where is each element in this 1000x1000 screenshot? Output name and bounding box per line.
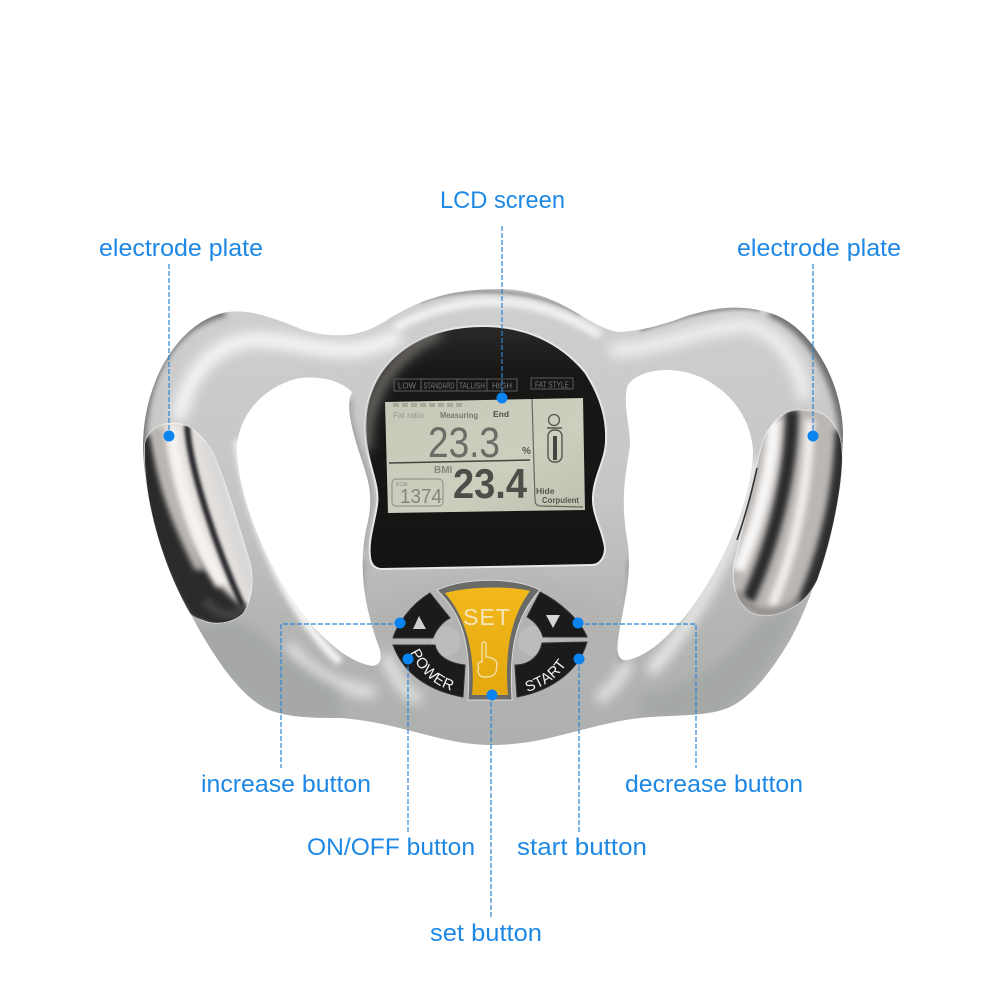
- power button: POWER: [410, 648, 454, 691]
- callout: start button: start button: [517, 834, 647, 861]
- callout: right electrode plate: electrode plate: [737, 235, 901, 262]
- LCD bezel: [365, 326, 606, 569]
- device body: [142, 289, 845, 745]
- callout: right electrode plate: [737, 235, 901, 442]
- decrease button: [527, 592, 587, 637]
- callout: left electrode plate: electrode plate: [99, 235, 263, 262]
- right electrode plate: [733, 410, 844, 616]
- callout: on/off button: ON/OFF button: [307, 834, 475, 861]
- callout: increase button: [201, 618, 406, 798]
- button cluster: [392, 580, 588, 700]
- start button: START: [526, 658, 564, 691]
- icon: pointing hand: [478, 642, 497, 677]
- callout: on/off button: [307, 654, 475, 861]
- body style panel: [532, 399, 583, 507]
- callout: increase button: increase button: [201, 771, 371, 798]
- LCD screen: [385, 398, 585, 513]
- start button: [514, 642, 588, 698]
- status labels: BMI: [434, 465, 453, 476]
- level scale labels: HIGH: [492, 382, 512, 390]
- set button: SET: [463, 604, 511, 630]
- status labels: Fat ratio: [393, 410, 424, 420]
- callout: decrease button: decrease button: [625, 771, 803, 798]
- level scale labels: LOW: [398, 382, 417, 390]
- calorie box: KCAL: [396, 482, 409, 488]
- callout: set button: [430, 690, 542, 947]
- fat ratio reading: 23.3: [428, 419, 500, 467]
- callout: set button: set button: [430, 920, 542, 947]
- calorie box: 1374: [400, 486, 442, 508]
- right hand opening: [617, 370, 753, 660]
- level scale labels: TALLISH: [459, 382, 485, 390]
- dark reflection beside right electrode: [737, 468, 757, 540]
- left hand opening: [237, 378, 381, 666]
- level scale labels: FAT STYLE: [535, 380, 569, 390]
- status labels: End: [493, 409, 509, 419]
- left electrode plate: [140, 423, 252, 632]
- calorie box: [392, 479, 443, 508]
- set button: [437, 580, 540, 700]
- status labels: [393, 409, 579, 505]
- status labels: Measuring: [440, 410, 478, 420]
- callout: decrease button: [572, 618, 803, 798]
- status labels: Corpulent: [542, 495, 579, 505]
- callout: start button: [517, 654, 647, 861]
- increase button: [393, 593, 450, 638]
- status labels: Hide: [536, 486, 555, 496]
- power button: [392, 644, 466, 698]
- callout: left electrode plate: [99, 235, 263, 442]
- progress segments: [393, 403, 462, 407]
- level scale labels: [394, 378, 573, 391]
- callout: LCD screen: LCD screen: [440, 187, 565, 214]
- status labels: %: [522, 446, 531, 457]
- BMI reading: 23.4: [453, 460, 528, 507]
- callout: LCD screen: [440, 187, 565, 404]
- level scale labels: STANDARD: [424, 382, 455, 390]
